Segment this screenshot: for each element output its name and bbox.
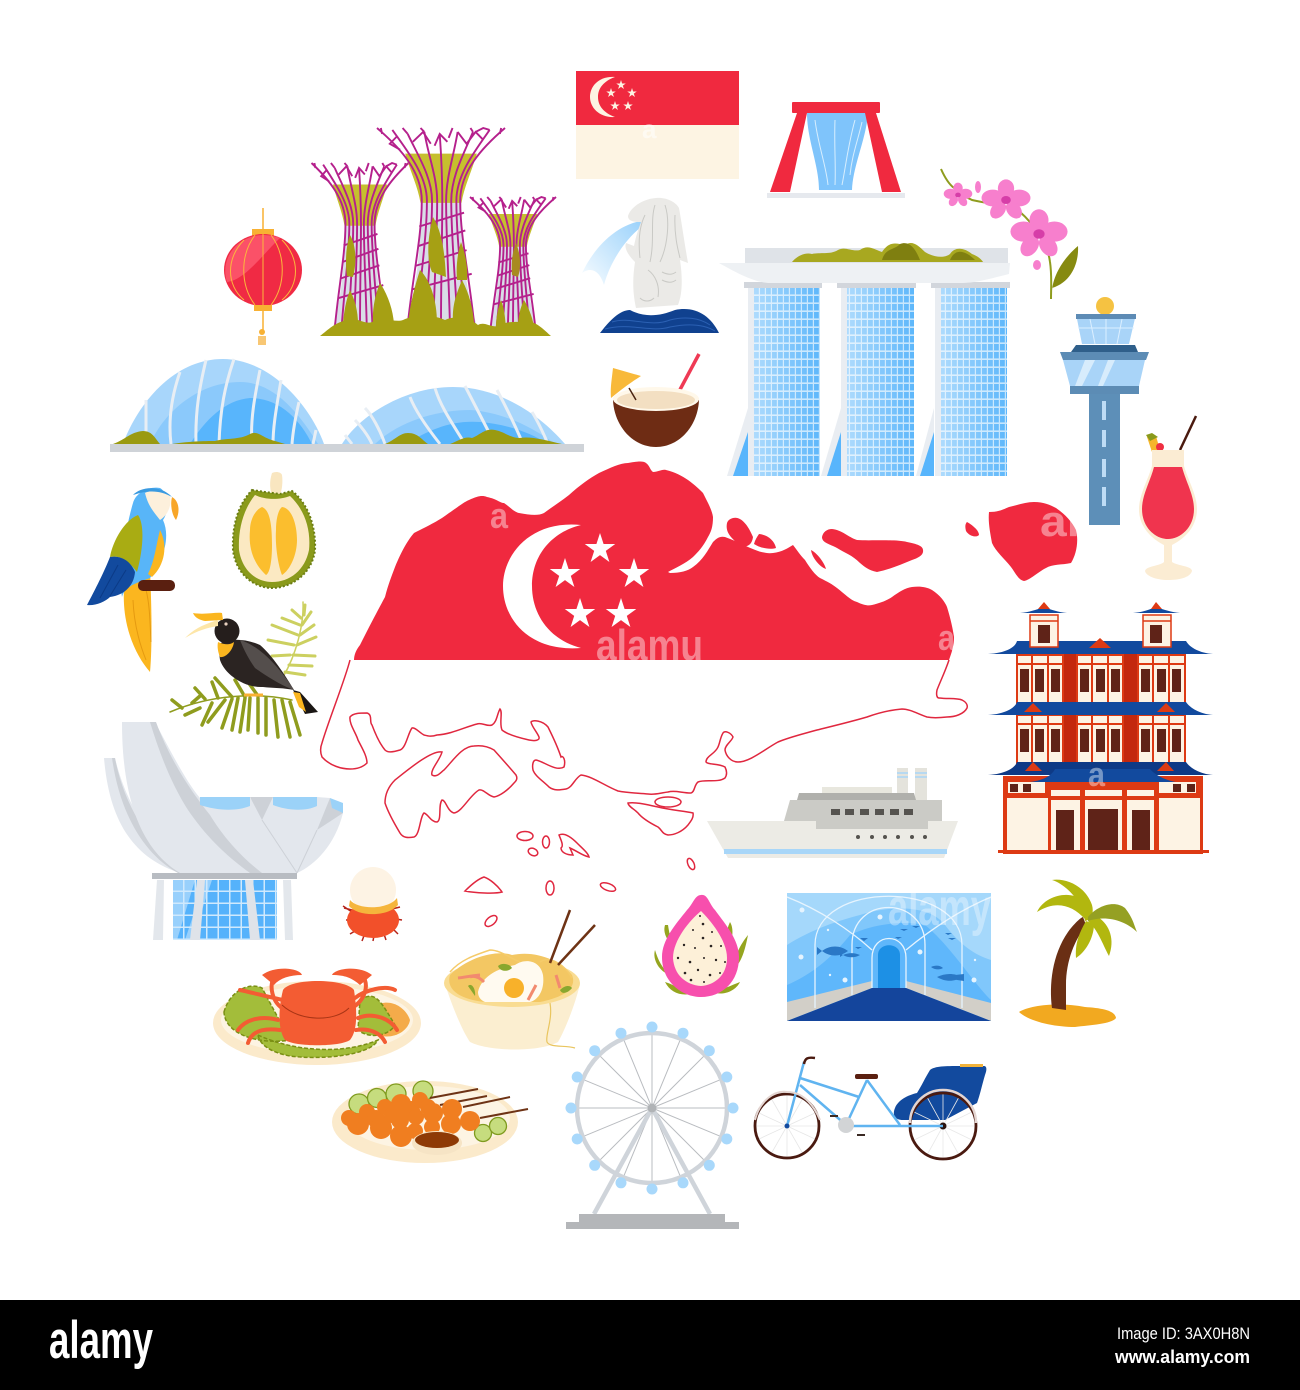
map of Singapore filled with flag — [320, 462, 1077, 929]
underwater tunnel aquarium: alamy — [888, 879, 991, 937]
flag stars on map — [550, 533, 649, 627]
dome left — [123, 359, 324, 444]
crab plate — [213, 969, 421, 1065]
trishaw seat — [894, 1066, 986, 1120]
left turret — [1020, 602, 1067, 647]
buddha tooth relic temple — [988, 602, 1213, 854]
watermark fragments: a — [490, 495, 509, 536]
climbing vines — [343, 217, 534, 327]
cloud forest and flower dome — [110, 359, 584, 452]
wheel base — [566, 1214, 739, 1229]
cruise ship — [707, 768, 958, 858]
alamy footer bar — [0, 1300, 1300, 1390]
palm tree island — [1019, 880, 1137, 1027]
wheel rim — [577, 1033, 727, 1183]
museum roof bar — [152, 873, 297, 879]
front wheel — [755, 1094, 819, 1158]
bicycle frame — [787, 1062, 943, 1126]
sky park — [745, 248, 1008, 263]
hornbill on palm leaves — [170, 602, 318, 737]
wheel hub — [648, 1104, 656, 1112]
flag crescent on map — [503, 525, 581, 648]
flag of Singapore: a — [642, 114, 657, 144]
tower 1 — [727, 282, 822, 476]
artscience museum — [104, 722, 343, 940]
museum petals — [104, 758, 200, 873]
ground bushes — [320, 316, 551, 336]
wheel legs — [594, 1108, 710, 1214]
image id: Image ID: 3AX0H8N — [1117, 1324, 1250, 1343]
underwater tunnel aquarium — [787, 879, 991, 1021]
parrot — [87, 488, 179, 672]
coconut drink — [611, 354, 699, 447]
orchid branch — [941, 169, 1078, 299]
handlebar — [804, 1058, 815, 1064]
dragon fruit — [654, 895, 748, 997]
middle floor — [1016, 712, 1186, 768]
top floor — [1016, 652, 1186, 707]
northeastern islands — [727, 502, 1077, 581]
satay plate — [332, 1081, 528, 1163]
noodle bowl — [444, 910, 595, 1050]
changi control tower — [1060, 297, 1149, 525]
marina barrage waterfall arch — [767, 102, 905, 198]
merlion statue — [582, 198, 719, 333]
singapore flyer ferris wheel — [566, 1022, 739, 1229]
top roof — [988, 641, 1213, 654]
supertree right — [470, 197, 556, 328]
alamy logo: alamy — [49, 1311, 153, 1370]
saddle — [855, 1074, 878, 1079]
supertree left — [312, 163, 408, 328]
olive palm leaf — [170, 678, 300, 737]
watermark fragments — [490, 495, 1106, 794]
right turret — [1133, 602, 1180, 647]
marina bay sands hotel — [719, 243, 1010, 476]
outlined western islands — [385, 746, 696, 929]
tower 3 — [916, 282, 1010, 476]
singapore sling cocktail — [1139, 416, 1197, 580]
lower roof — [988, 762, 1213, 775]
rambutan fruit — [343, 867, 402, 941]
watermark fragments: a — [938, 617, 956, 658]
lantern — [224, 208, 302, 345]
red outline of southern coast — [320, 660, 967, 794]
dome bushes — [113, 430, 562, 444]
trishaw bicycle — [755, 1058, 986, 1159]
museum glass base — [173, 880, 277, 940]
wheel capsules — [566, 1022, 738, 1194]
rear wheel — [910, 1090, 976, 1159]
durian fruit — [233, 472, 315, 588]
supertree grove — [312, 128, 556, 336]
website: www.alamy.com — [1114, 1347, 1250, 1367]
middle roof — [988, 702, 1213, 715]
hornbill body — [218, 640, 294, 690]
red upper part of main island — [354, 462, 954, 660]
flag of Singapore — [576, 71, 739, 179]
watermark fragments: a — [1088, 756, 1106, 794]
ground floor — [998, 776, 1209, 854]
light palm leaf — [268, 602, 316, 677]
dome right — [342, 387, 565, 444]
tower 2 — [821, 282, 916, 476]
supertree centre — [377, 128, 505, 325]
watermark fragments: al — [1040, 497, 1080, 546]
wheel spokes — [577, 1033, 727, 1183]
dome ground — [110, 444, 584, 452]
